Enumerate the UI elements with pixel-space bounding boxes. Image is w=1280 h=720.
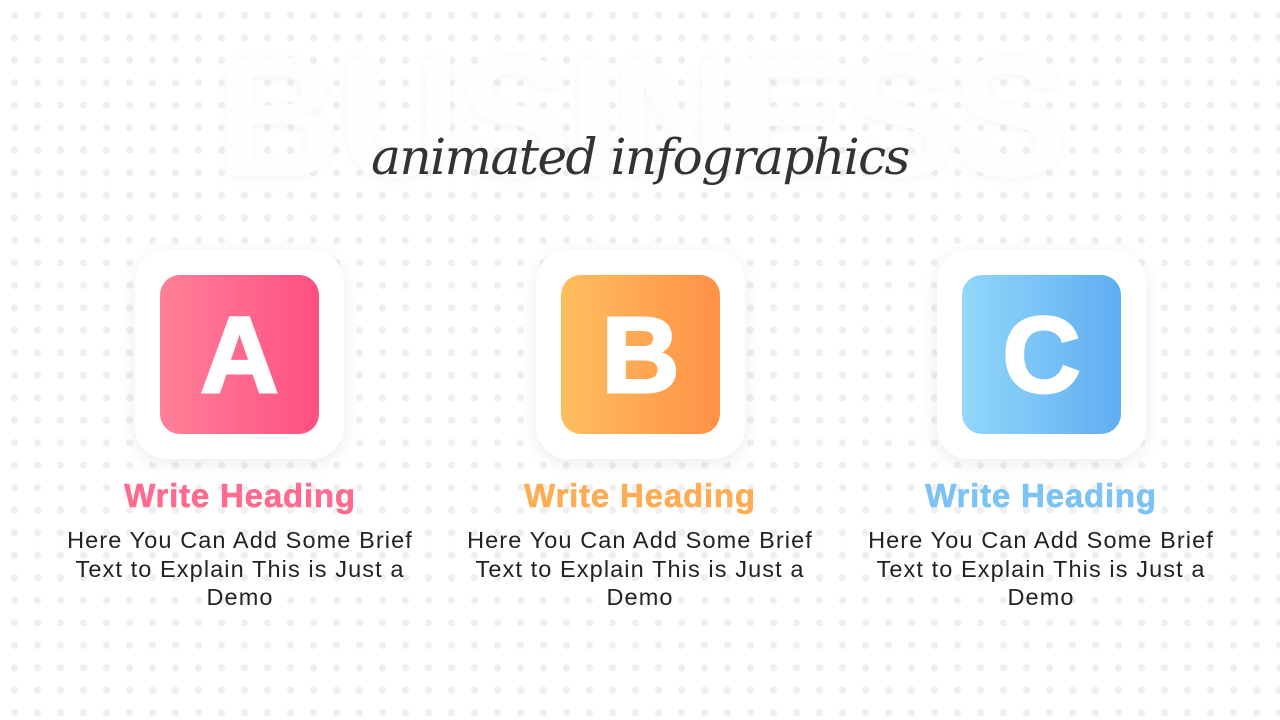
- text C: Text to Explain This is Just a: [876, 556, 1206, 582]
- text B: Demo: [606, 584, 674, 610]
- title: BUSINESS: BUSINESS: [216, 21, 1064, 213]
- icon: A: [160, 275, 319, 434]
- subtitle script: animated infographics: [371, 128, 909, 186]
- heading C: Write Heading: [925, 477, 1157, 514]
- text B: Here You Can Add Some Brief: [467, 527, 813, 553]
- text B: [467, 527, 813, 610]
- card B: [536, 250, 745, 459]
- text C: Here You Can Add Some Brief: [868, 527, 1214, 553]
- text C: Demo: [1007, 584, 1075, 610]
- icon: C: C: [1002, 294, 1080, 415]
- heading B: Write Heading: [524, 477, 756, 514]
- text A: [67, 527, 413, 610]
- icon: C: [962, 275, 1121, 434]
- text A: Demo: [206, 584, 274, 610]
- text C: [868, 527, 1214, 610]
- heading A: Write Heading: [124, 477, 356, 514]
- icon: B: [561, 275, 720, 434]
- text B: Text to Explain This is Just a: [475, 556, 805, 582]
- text A: Text to Explain This is Just a: [75, 556, 405, 582]
- card A: [135, 250, 344, 459]
- icon: A: A: [200, 294, 278, 415]
- text A: Here You Can Add Some Brief: [67, 527, 413, 553]
- icon: B: B: [602, 294, 680, 415]
- card C: [937, 250, 1146, 459]
